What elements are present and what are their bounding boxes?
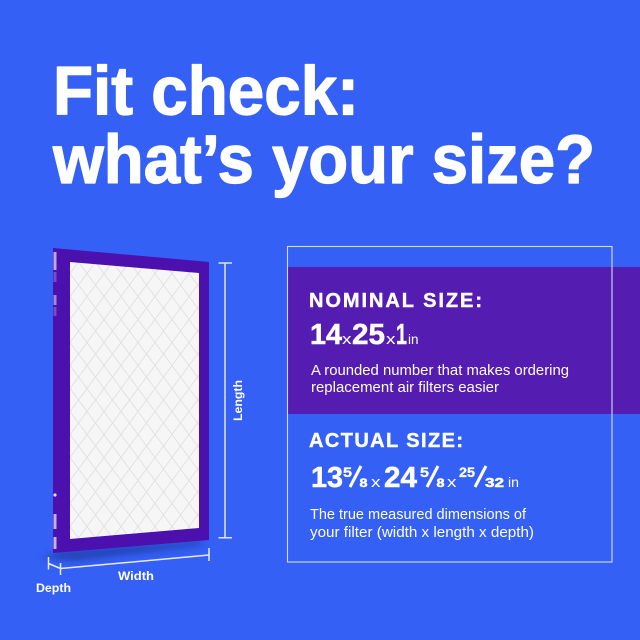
actual dimensions: 5 [420,464,429,480]
filter illustration [42,248,209,561]
nominal dimensions: x [386,331,396,348]
nominal heading: NOMINAL SIZE: [309,290,482,312]
actual dimensions: 25 [459,464,475,480]
actual dimensions: 13 [311,462,343,494]
title: Fit check: [53,52,359,130]
length dimension [218,263,245,538]
filter frame [53,248,209,553]
nominal description: A rounded number that makes ordering [311,363,569,379]
outline box [288,246,612,562]
depth label: Depth [36,583,71,595]
actual dimensions [311,462,519,494]
actual description [310,507,534,541]
nominal description [311,363,569,396]
actual dimensions: in [508,474,519,490]
panel: nominal size [309,290,569,396]
nominal dimensions: 25 [352,319,385,351]
actual dimensions: 8 [436,476,445,490]
width label: Width [118,571,154,583]
title [52,52,595,198]
actual heading: ACTUAL SIZE: [309,430,463,452]
panel: actual size [309,430,534,541]
length label: Length [233,380,245,421]
nominal dimensions [310,319,418,351]
actual dimensions: 8 [360,476,368,490]
nominal dimensions: in [408,331,418,347]
actual description: your filter (width x length x depth) [310,525,534,541]
actual description: The true measured dimensions of [310,507,527,523]
width dimension [60,548,209,583]
filter side label [53,252,57,549]
nominal band [288,267,640,414]
title: what’s your size? [52,121,595,198]
actual dimensions: 5 [343,464,352,480]
actual dimensions: x [447,474,457,491]
nominal dimensions: 1 [396,319,407,351]
nominal description: replacement air filters easier [311,380,499,396]
actual dimensions: 24 [384,462,417,494]
filter media [70,262,199,539]
depth dimension [36,557,71,595]
nominal dimensions: 14 [310,319,342,351]
actual dimensions: x [371,474,381,491]
actual dimensions: 32 [485,476,504,490]
nominal dimensions: x [342,331,352,348]
